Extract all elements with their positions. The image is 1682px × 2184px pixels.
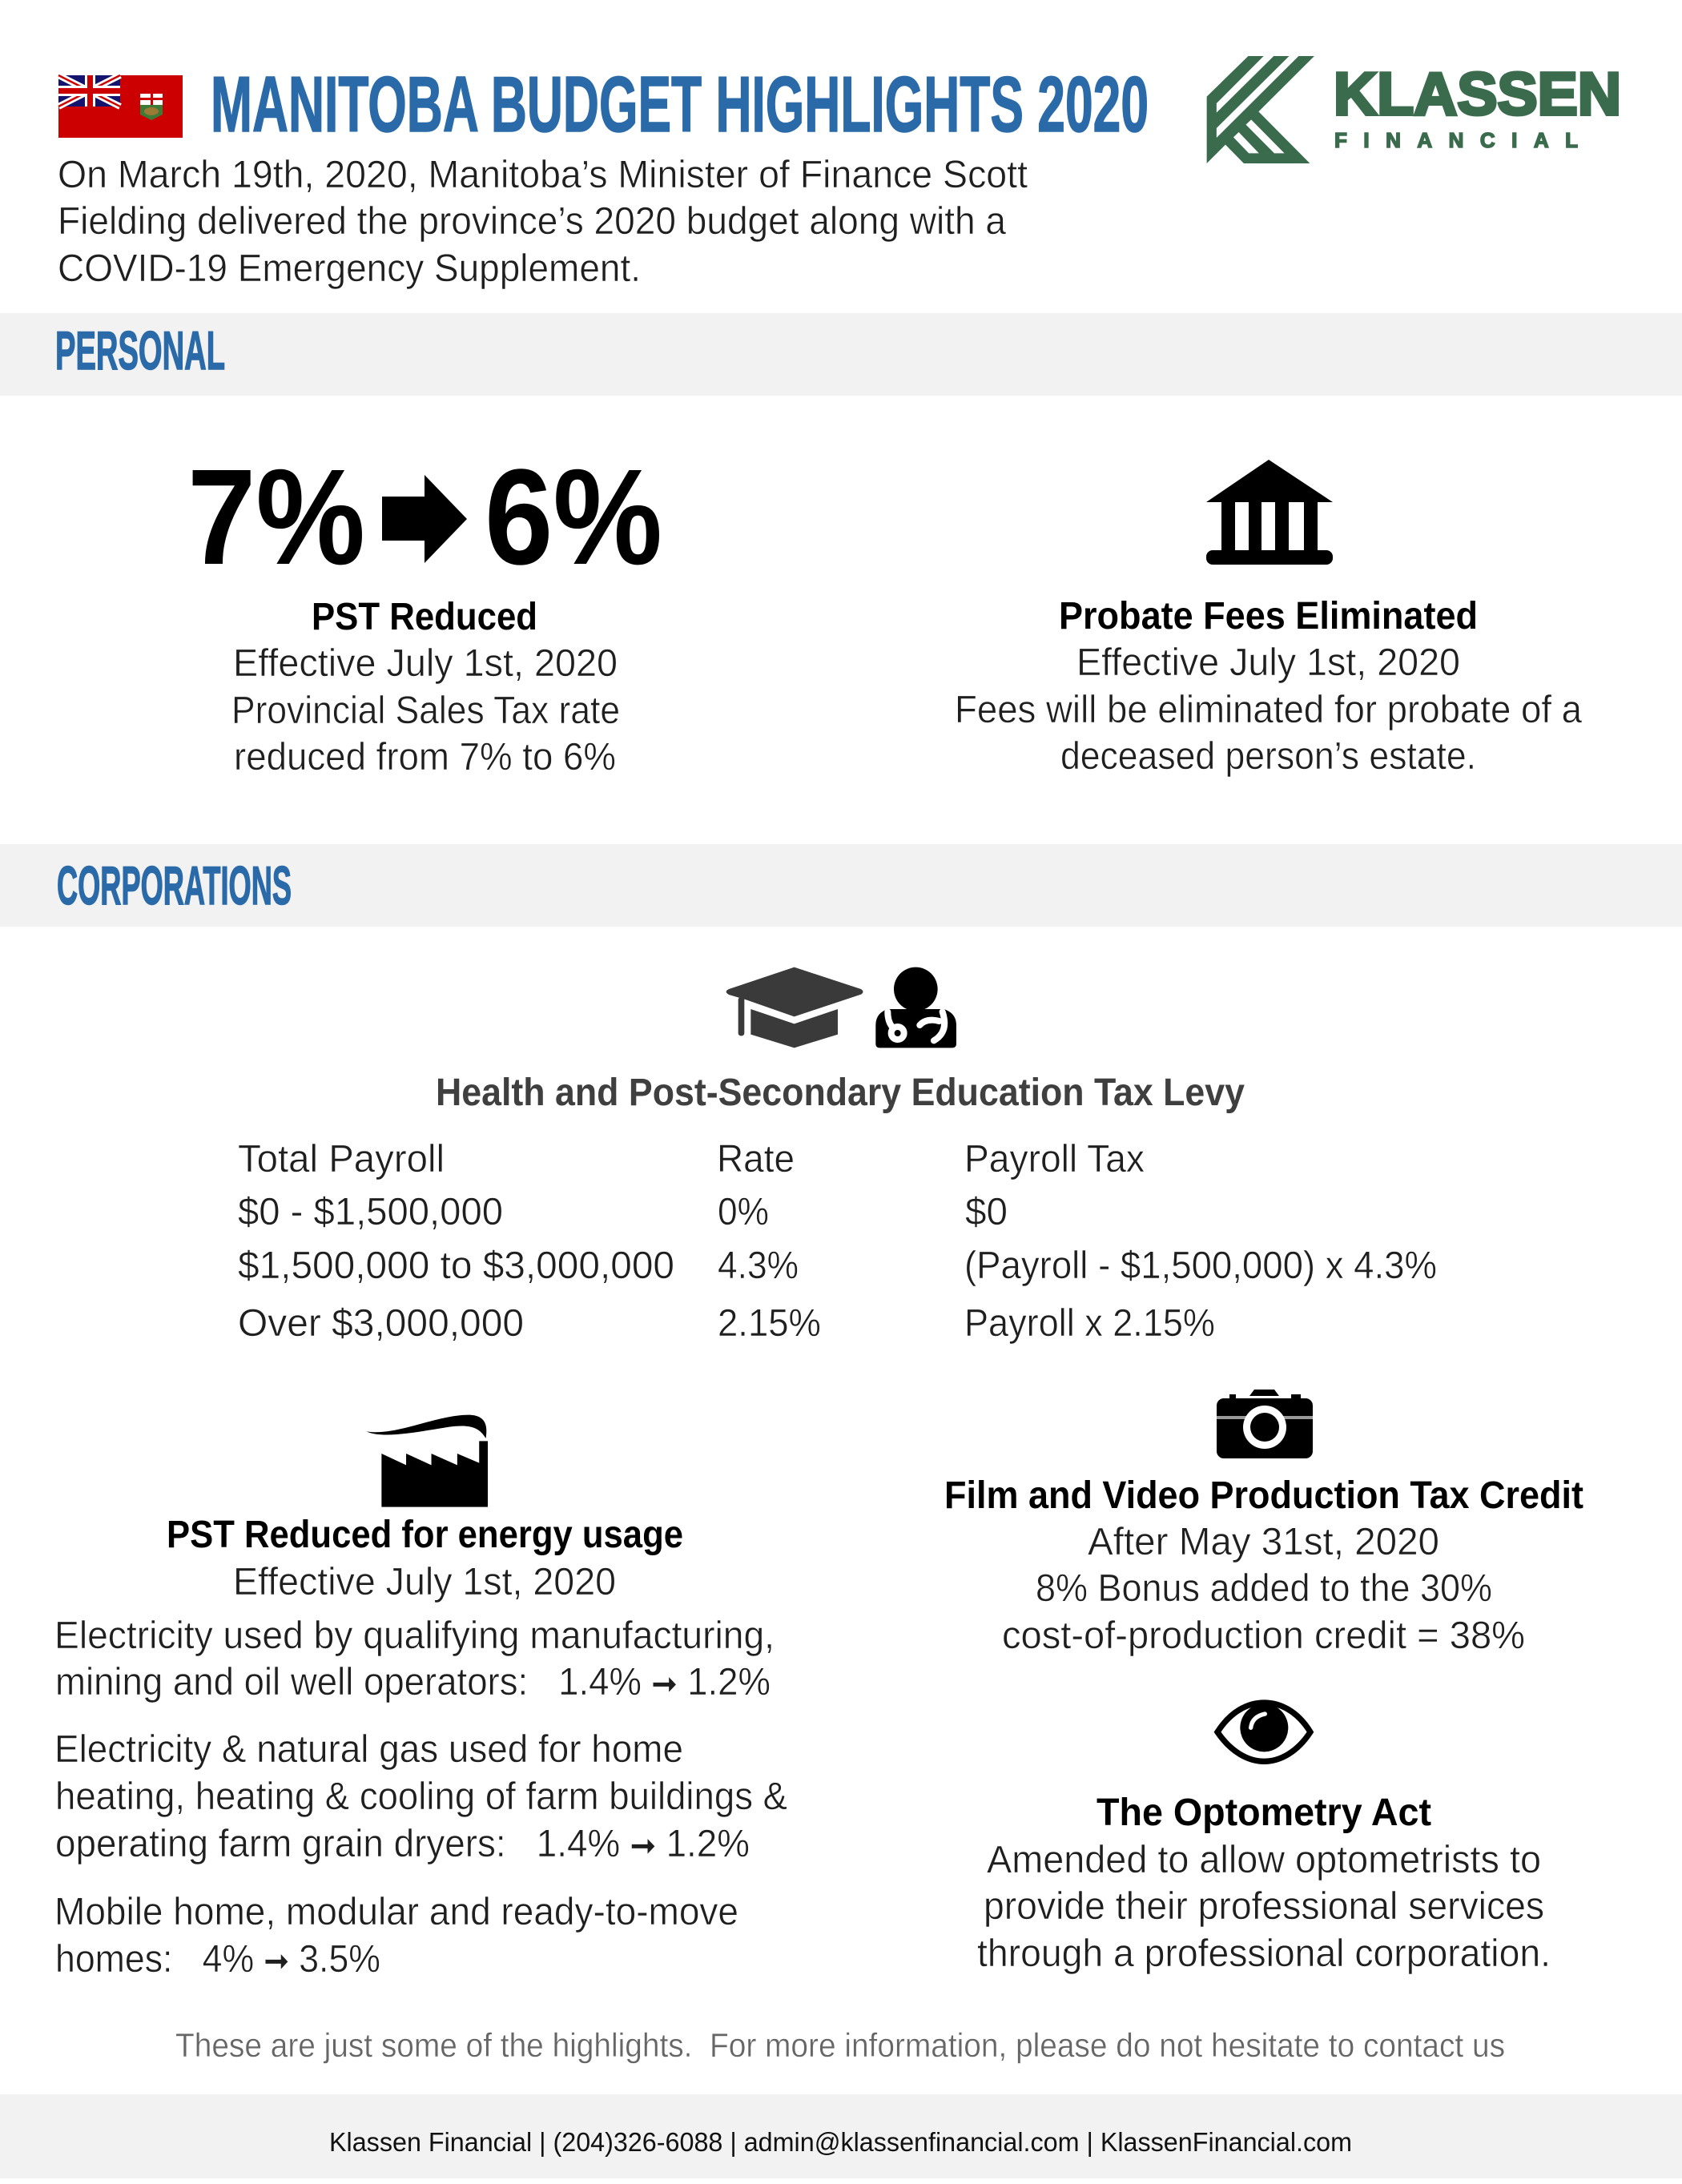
- table: payroll tax: $1,500,000 to $3,000,000: [238, 1245, 674, 1287]
- footer band: [0, 2094, 1682, 2178]
- item: mobile homes: Mobile home, modular and ready-to-move: [54, 1891, 738, 1933]
- heading: PST Reduced for energy usage: [167, 1514, 683, 1556]
- heading: Probate Fees Eliminated: [1059, 595, 1478, 638]
- body text: [977, 1839, 1551, 1975]
- table: payroll tax: 0%: [718, 1191, 769, 1233]
- body text: After May 31st, 2020: [1088, 1521, 1439, 1563]
- big figure: 7% to 6%: 6%: [485, 441, 662, 593]
- item: electricity for operators: Electricity used by qualifying manufacturing,: [54, 1615, 775, 1657]
- item: electricity and gas for farms: heating, heating & cooling of farm buildings &: [55, 1776, 787, 1818]
- heading: PST Reduced: [312, 596, 537, 638]
- item: mobile homes: homes: 4% ➞ 3.5%: [55, 1938, 380, 1981]
- icon: factory: [366, 1415, 488, 1507]
- icon: bank: [1206, 460, 1333, 565]
- logo wordmark: KLASSEN: [1334, 60, 1621, 127]
- panel: health and education levy: [238, 1072, 1437, 1345]
- icon: doctor with stethoscope: [875, 967, 956, 1048]
- table: payroll tax: Payroll x 2.15%: [964, 1302, 1215, 1345]
- body text: Provincial Sales Tax rate: [231, 690, 620, 732]
- intro text: [58, 154, 1028, 290]
- body text: Effective July 1st, 2020: [1076, 642, 1460, 684]
- table: payroll tax: 4.3%: [718, 1245, 799, 1287]
- table: payroll tax: Over $3,000,000: [238, 1302, 524, 1345]
- item: electricity and gas for farms: Electricity & natural gas used for home: [54, 1728, 683, 1771]
- heading: Health and Post-Secondary Education Tax Levy: [436, 1072, 1245, 1114]
- table: payroll tax: Total Payroll: [238, 1138, 445, 1180]
- panel: probate fees: [955, 460, 1582, 778]
- intro text: On March 19th, 2020, Manitoba’s Minister of Finance Scott: [58, 154, 1028, 196]
- heading: The Optometry Act: [1097, 1792, 1431, 1834]
- logo wordmark: FINANCIAL: [1334, 128, 1578, 152]
- item: mobile homes: [54, 1891, 738, 1981]
- title: MANITOBA BUDGET HIGHLIGHTS 2020: [211, 60, 1149, 148]
- body text: deceased person’s estate.: [1060, 735, 1476, 778]
- icon: graduation cap: [726, 967, 863, 1048]
- section band: corporations: [0, 844, 1682, 927]
- item: electricity for operators: [54, 1615, 775, 1703]
- body text: through a professional corporation.: [977, 1933, 1551, 1975]
- icon: eye: [1217, 1703, 1310, 1761]
- table: payroll tax: $0: [965, 1191, 1008, 1233]
- intro text: Fielding delivered the province’s 2020 budget along with a: [58, 200, 1006, 243]
- body text: Fees will be eliminated for probate of a: [955, 689, 1582, 731]
- section band: personal: [0, 313, 1682, 396]
- table: payroll tax: Payroll Tax: [964, 1138, 1145, 1180]
- table: payroll tax: 2.15%: [718, 1302, 821, 1345]
- effective date: Effective July 1st, 2020: [233, 1561, 616, 1603]
- body text: [1002, 1521, 1525, 1657]
- panel: PST reduced: [187, 441, 662, 778]
- section band: personal: PERSONAL: [55, 320, 225, 381]
- heading: Film and Video Production Tax Credit: [944, 1474, 1583, 1517]
- table: payroll tax: [238, 1138, 1437, 1345]
- panel: optometry act: [977, 1703, 1551, 1975]
- table: payroll tax: Rate: [717, 1138, 795, 1180]
- table: payroll tax: (Payroll - $1,500,000) x 4.3%: [964, 1245, 1437, 1287]
- big figure: 7% to 6%: [187, 441, 662, 593]
- logo: Klassen Financial: [1207, 56, 1621, 163]
- panel: PST reduced for energy usage: [54, 1415, 787, 1981]
- body text: 8% Bonus added to the 30%: [1036, 1567, 1492, 1610]
- body text: Amended to allow optometrists to: [987, 1839, 1541, 1881]
- logo mark: [1207, 56, 1314, 163]
- footer band: Klassen Financial | (204)326-6088 | admin@klassenfinancial.com | KlassenFinancial.com: [329, 2127, 1352, 2157]
- body text: [955, 642, 1582, 778]
- intro text: COVID-19 Emergency Supplement.: [58, 247, 641, 290]
- closing note: These are just some of the highlights. For more information, please do not hesitate to contact us: [175, 2026, 1505, 2064]
- table: payroll tax: $0 - $1,500,000: [238, 1191, 503, 1233]
- body text: reduced from 7% to 6%: [234, 736, 616, 778]
- body text: Effective July 1st, 2020: [233, 642, 618, 685]
- body text: provide their professional services: [984, 1885, 1544, 1928]
- body text: [231, 642, 620, 778]
- item: electricity and gas for farms: [54, 1728, 787, 1865]
- item: electricity for operators: mining and oil well operators: 1.4% ➞ 1.2%: [55, 1661, 771, 1703]
- icon: Manitoba flag: [58, 75, 183, 138]
- item: electricity and gas for farms: operating farm grain dryers: 1.4% ➞ 1.2%: [55, 1823, 750, 1865]
- big figure: 7% to 6%: 7%: [187, 441, 365, 593]
- icon: camera: [1217, 1390, 1313, 1458]
- body text: cost-of-production credit = 38%: [1002, 1615, 1525, 1657]
- section band: corporations: CORPORATIONS: [57, 855, 292, 916]
- panel: film and video credit: [944, 1390, 1583, 1657]
